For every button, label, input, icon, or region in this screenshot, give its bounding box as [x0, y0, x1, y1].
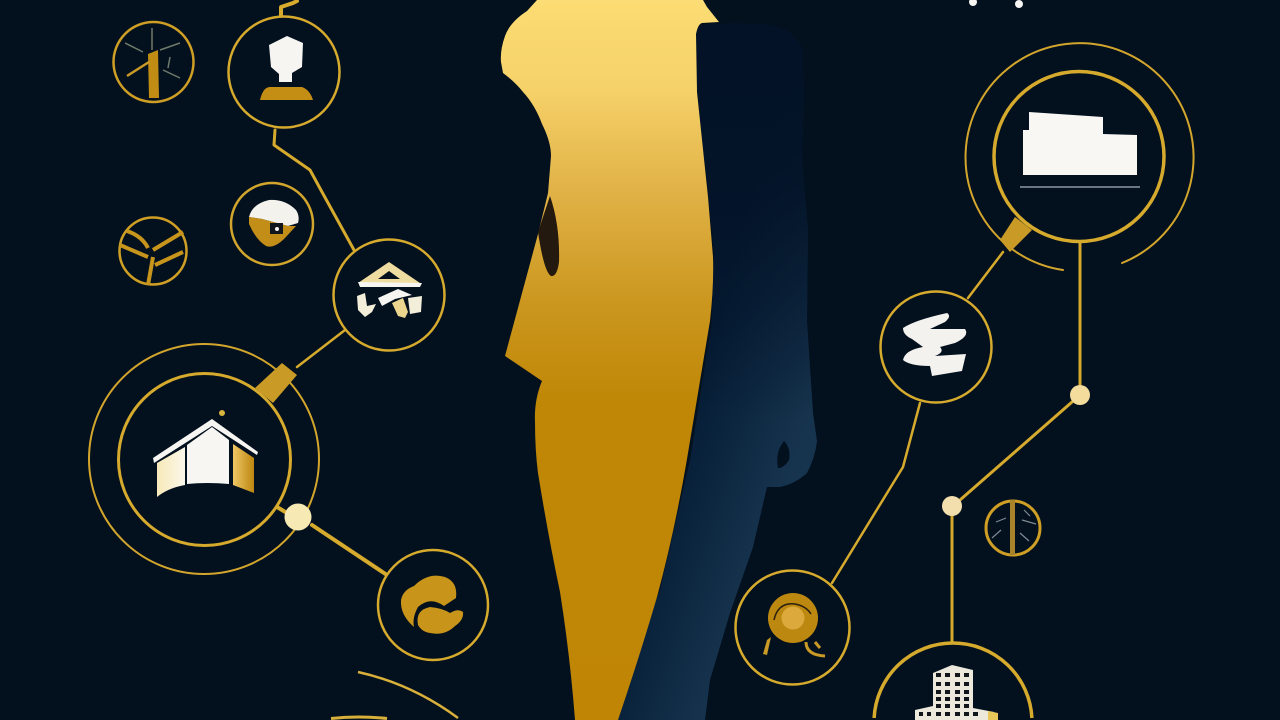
icon: tree circle — [114, 22, 194, 102]
node dot upper right — [1070, 385, 1090, 405]
icon: house — [153, 410, 258, 497]
icon: wheat leaf circle — [120, 218, 186, 285]
left network connectors — [274, 1, 387, 575]
icon: person circle — [228, 16, 340, 128]
icon: coffee bean circle — [378, 550, 488, 660]
icon: brush circle — [880, 292, 992, 402]
icon: bar chart — [1020, 112, 1140, 187]
right network connectors — [832, 243, 1080, 642]
big chart circle — [966, 43, 1194, 270]
top right text fragments — [969, 0, 1023, 8]
node dot left — [284, 504, 312, 530]
bottom left partial circle — [331, 672, 458, 718]
connector block — [255, 363, 297, 403]
building — [915, 665, 998, 720]
icon: roof circle — [334, 240, 444, 350]
big house circle — [89, 344, 319, 574]
eye — [538, 196, 559, 276]
navy body half — [612, 23, 817, 720]
gold face half — [501, 0, 719, 720]
icon: landscape circle — [231, 183, 313, 265]
node dot lower right — [942, 496, 962, 516]
icon: building circle — [874, 643, 1032, 720]
icon: gold ring circle — [736, 570, 850, 684]
central figure silhouette — [501, 0, 817, 720]
connector block — [1000, 217, 1032, 252]
ear notch — [777, 441, 789, 468]
icon: small clock tree circle — [986, 500, 1040, 555]
